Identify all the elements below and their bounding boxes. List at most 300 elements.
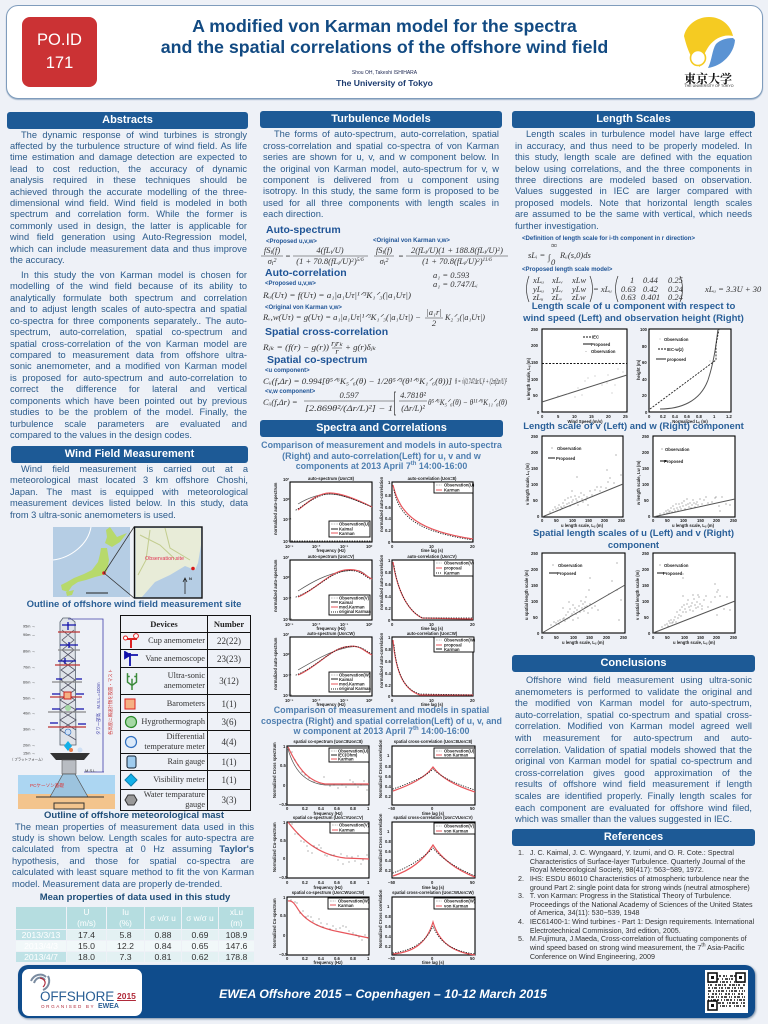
equations: auto-spectrum: σ: [268, 256, 272, 266]
chart: u length scale vs wind speed: u length scale, Lᵤ (m): [526, 357, 531, 400]
chart: w spatial cross-correlation: 50: [470, 956, 475, 961]
heading: conclusions: Conclusions: [600, 657, 666, 669]
reference list: 1. J. C. Kaimal, J. C. Wyngaard, Y. Izumi, and O. R. Cote.: Spectral: [518, 849, 734, 857]
chart: w auto-correlation: 20: [470, 698, 475, 703]
table: measurement devices: gauge: [185, 800, 205, 809]
chart: u length scale vs wind speed: IEC: [592, 334, 599, 340]
chart: v spatial co-spectrum: 0.2: [302, 880, 308, 885]
equations: auto-spectrum: /U): [485, 245, 498, 255]
conclusions text: which was smaller than the values suggested in IEC.: [515, 814, 732, 824]
chart: w spatial co-spectrum: 0: [286, 956, 289, 961]
poster id badge: PO.ID: [37, 31, 82, 49]
chart: w auto-spectrum: 10⁻³: [285, 698, 294, 703]
poster id badge: [22, 17, 97, 87]
chart: u auto-spectrum: 10²: [283, 477, 290, 482]
table: mean properties of data: 0.62: [192, 952, 208, 962]
caption: spatial length scales: [533, 528, 734, 550]
abstract text: spatial cross-correlation of the von Karman model are: [10, 339, 247, 349]
equations: auto-spectrum: ): [353, 256, 357, 266]
equations: auto-spectrum: i: [270, 250, 272, 256]
chart: v spatial cross-correlation: Observation(V): [444, 824, 475, 828]
chart: w length scale: 150: [642, 466, 650, 471]
chart: v length scale: 0: [537, 514, 540, 519]
chart: v spatial co-spectrum: spatial co-spectrum (Uon=VUon=V): [293, 815, 364, 820]
chart: w auto-correlation: [379, 631, 476, 707]
chart: v spatial cross-correlation: von Karman: [444, 828, 469, 834]
chart: v spatial cross-correlation: 50: [470, 880, 475, 885]
chart: u length scale vs height: 60: [642, 360, 647, 365]
chart: spatial v length scale: 200: [713, 635, 721, 640]
table: mean properties of data: xLu: [230, 908, 243, 917]
length scales text: further investigation.: [515, 221, 599, 231]
conclusions text: results of offshore wind field measurement if length: [515, 779, 752, 789]
university name: 東京大学: [684, 70, 732, 87]
chart: u auto-spectrum: auto-spectrum (Uon=8): [308, 476, 355, 481]
abstract text: spectrum and correlation form. While the former is: [10, 209, 247, 219]
chart: u auto-spectrum: normalized auto-spectrum: [273, 482, 278, 535]
heading: length scales: [512, 111, 755, 128]
measurement text: Wind field measurement is carried out at a: [21, 464, 248, 474]
caption: spatial comparison: w component at 2013 April 7th 14:00-16:00: [293, 726, 470, 736]
equations: auto-spectrum: (1 + 70.8(fL: [422, 256, 464, 266]
chart: w spatial co-spectrum: Karman: [338, 903, 354, 908]
equations: auto-spectrum: 2(fL: [411, 245, 425, 255]
chart: u length scale vs wind speed: 250: [531, 327, 539, 332]
chart: w auto-correlation: 0: [388, 694, 391, 699]
chart: u auto-correlation: 1: [388, 480, 391, 485]
chart: v spatial cross-correlation: 1: [387, 829, 390, 834]
equations: spatial co-spectrum: 4.781θ²: [400, 390, 426, 400]
length scales text: three directions are modeled based on observation.: [515, 175, 752, 185]
chart: u length scale vs height: 40: [642, 377, 647, 382]
measurement text: meteorological mast located 3 km offshore Choshi,: [10, 475, 248, 485]
chart: w spatial cross-correlation: −50: [388, 956, 396, 961]
equations: auto-correlation: <Proposed u,v,w>: [265, 281, 316, 287]
equations: spatial cross-correlation: Spatial cross-correlation: [265, 326, 388, 338]
equations: proposed length scale model: 0.25: [668, 275, 683, 285]
chart: w length scale: [636, 434, 738, 528]
chart: w auto-spectrum: 10⁻⁴: [283, 693, 292, 698]
equations: auto-spectrum: (f): [384, 245, 392, 255]
chart: w auto-correlation: time lag (s): [421, 702, 444, 707]
chart: u auto-correlation: auto-correlation (Uon=8): [408, 476, 457, 481]
chart: w spatial co-spectrum: 0.4: [318, 956, 324, 961]
chart: w spatial cross-correlation: spatial cross-correlation (Uon=WUon=W): [392, 890, 474, 895]
equations: length scale definition: [522, 236, 695, 267]
chart: v spatial co-spectrum: Observation(V): [339, 822, 370, 828]
chart: w spatial co-spectrum: 0.5: [280, 913, 286, 918]
chart: w spatial cross-correlation: Normalized Cross correlation: [378, 889, 383, 948]
table: measurement devices: 3(3): [222, 795, 236, 805]
equations: auto-spectrum: 5/6: [357, 257, 364, 263]
equations: auto-spectrum: σ: [380, 256, 384, 266]
chart: spatial u length scale: Proposed: [557, 571, 577, 576]
chart: v length scale: 100: [569, 518, 577, 523]
abstract text: wind field generation using Auto-Regression model,: [10, 232, 247, 242]
table: measurement devices: 4(4): [222, 737, 236, 747]
chart: v auto-spectrum: 10⁻³: [285, 622, 294, 627]
reference list: Characteristics of Surface-layer Turbulence. Quarterly Journal of the: [530, 858, 745, 866]
equations: length scale definition: Rᵢᵢ(s,0)ds: [559, 250, 591, 260]
chart: u auto-spectrum: 10⁰: [283, 497, 290, 502]
caption: auto-spectra comparison: Comparison of measurement and models in auto-spectra: [261, 440, 502, 450]
chart: v spatial co-spectrum: 0.5: [280, 838, 286, 843]
chart: w auto-correlation: 0.6: [385, 659, 391, 664]
chart: u spatial co-spectrum: −0.5: [279, 802, 288, 807]
equations: auto-correlation: [262, 267, 485, 328]
length scales text: Values suggested in IEC are larger compared with: [515, 186, 752, 196]
chart: u length scale vs wind speed: Observation: [591, 349, 616, 354]
measurement text: Japan. The mast is equipped with meteorological: [10, 487, 248, 497]
panel: references: [512, 829, 755, 960]
conclusions text: cross-correlation gives good approximation of the: [515, 768, 752, 778]
abstract text: time estimation and damage detection are expected to: [10, 152, 247, 162]
chart: v auto-spectrum: [273, 554, 373, 631]
chart: spatial u length scale: u spatial length scale (m): [524, 569, 529, 620]
chart: w length scale: 0: [648, 514, 651, 519]
chart: v length scale: 250: [531, 434, 539, 439]
chart: v auto-spectrum: original Karman: [339, 609, 371, 614]
table: mean properties of data: (%): [119, 919, 132, 928]
table: mean properties of data: 0.81: [155, 952, 171, 962]
caption: spatial comparison: [261, 705, 502, 736]
equations: auto-correlation: a₁ = 0.747/Lᵢ: [433, 279, 478, 289]
equations: auto-spectrum: i: [464, 261, 466, 267]
chart: w spatial cross-correlation: 0.4: [385, 934, 391, 939]
caption: mast outline: Outline of offshore meteorological mast: [44, 810, 224, 821]
equations: proposed length scale model: xLᵤ: [532, 275, 544, 285]
chart: w spatial co-spectrum: 0.8: [350, 956, 356, 961]
chart: spatial u length scale: 0: [541, 635, 544, 640]
chart: v spatial co-spectrum: 0.6: [334, 880, 340, 885]
table: measurement devices: Ultra-sonic: [168, 671, 205, 680]
chart: u length scale vs wind speed: 150: [531, 360, 539, 365]
authors: Shou OH, Takeshi ISHIHARA: [352, 70, 417, 76]
reference list: ground Part 2: single point data for strong winds (neutral atmosphere): [530, 884, 750, 892]
chart: v auto-correlation: 0.8: [385, 570, 391, 575]
table: measurement devices: Barometers: [167, 698, 205, 708]
chart: w length scale: 200: [642, 450, 650, 455]
equations: spatial cross-correlation: Rⱼₖ = (f(r) − g(r)): [262, 342, 329, 352]
chart: v spatial co-spectrum: 0: [286, 880, 289, 885]
equations: proposed length scale model: yLᵥ: [551, 284, 563, 294]
chart: w length scale: Observation: [665, 447, 690, 452]
caption: spatial comparison: Comparison of measurement and models in spatial: [274, 705, 489, 715]
equations: auto-spectrum: 2: [385, 258, 388, 264]
chart: u auto-correlation: [379, 476, 475, 553]
chart: spatial v length scale: 50: [665, 635, 670, 640]
turbulence text: cross-correlation and spatial co-spectra of von Karman: [263, 141, 499, 151]
chart: u spatial co-spectrum: 1: [367, 806, 370, 811]
equations: auto-spectrum: i: [382, 250, 384, 256]
chart: spatial v length scale: 150: [697, 635, 705, 640]
table: measurement devices: Vane anemoscope: [145, 654, 205, 662]
conclusions text: correlation. Modified von Karman model agreed well: [515, 721, 752, 731]
table: mean properties of data: 12.2: [117, 941, 134, 951]
illustration: offshore meteorological mast: 15m →: [23, 752, 35, 756]
equations: proposed length scale model: 0.63: [621, 284, 636, 294]
turbulence text: series are shown for u, v, and w component below. In: [263, 152, 499, 162]
chart: u length scale vs wind speed: 50: [533, 393, 538, 398]
equations: auto-spectrum: 2: [477, 258, 480, 264]
equations: proposed length scale model: xLw: [571, 275, 586, 285]
length scales text: in accuracy, and thus need to be properly modeled. In: [515, 141, 752, 151]
equations: auto-spectrum: 2: [497, 247, 500, 253]
chart: spatial v length scale: 100: [642, 599, 650, 604]
heading: wind field measurement: Wind Field Measurement: [65, 448, 194, 460]
chart: u auto-spectrum: 10⁻²: [312, 544, 321, 549]
chart: v length scale: [525, 434, 626, 528]
chart: v auto-correlation: proposal: [444, 566, 462, 570]
table: measurement devices: Hygrothermograph: [141, 716, 205, 726]
chart: spatial u length scale: [524, 551, 628, 645]
measurement text: from 3 ultra-sonic anemometers is used.: [10, 510, 176, 520]
chart: spatial v length scale: Proposed: [663, 571, 683, 576]
icon: cup anemometer: [123, 633, 139, 648]
table: mean properties of data: 0.69: [192, 930, 208, 940]
logo swirl: [30, 974, 50, 991]
chart: v auto-correlation: normalized auto-correlation: [379, 554, 384, 610]
chart: spatial u length scale: Observation: [558, 563, 583, 568]
chart: v auto-correlation: 0: [391, 622, 394, 627]
equations: length scale definition: <Definition of length scale for i-th component in r direction>: [522, 236, 695, 242]
chart: u length scale vs height: 20: [642, 393, 647, 398]
equations: proposed length scale model: 1: [630, 275, 634, 285]
equations: proposed length scale model: 0.24: [668, 284, 684, 294]
chart: spatial u length scale: 100: [570, 635, 578, 640]
chart: w spatial cross-correlation: Observation(W): [444, 898, 476, 904]
map: choshi observation site inset: [134, 527, 202, 598]
text: mean properties description: hypothesis, and those for spatial co-spectra are: [12, 856, 254, 866]
turbulence text: [263, 129, 499, 219]
chart: w auto-spectrum: normalized auto-spectrum: [273, 637, 278, 690]
equations: auto-spectrum: fS: [264, 245, 270, 255]
illustration: offshore meteorological mast: 80m →: [23, 650, 35, 654]
footer logo: offshore 2015: [22, 969, 142, 1016]
measurement text: measurement devices listed below. In this study, data: [10, 498, 248, 508]
chart: v spatial co-spectrum: 0.8: [350, 880, 356, 885]
chart: w spatial cross-correlation: 0.6: [385, 924, 391, 929]
equations: proposed length scale model: 0.44: [643, 275, 659, 285]
chart: w spatial co-spectrum: Normalized Co-spectrum: [272, 898, 277, 948]
chart: u auto-correlation: Karman: [444, 488, 460, 492]
title: [161, 16, 608, 57]
caption: auto-spectra comparison: [261, 440, 502, 471]
chart: w auto-spectrum: mod.Karman: [339, 682, 365, 686]
chart: u length scale vs height: 1.2: [726, 414, 732, 419]
chart: w auto-correlation: 10: [429, 698, 434, 703]
chart: u length scale vs height: [636, 327, 732, 424]
turbulence text: component is delivered from u component using: [263, 175, 499, 185]
equations: spatial co-spectrum: θ = √(0.747Δr/L)² + (2πfΔr/U)²: [455, 376, 507, 386]
chart: w auto-spectrum: 10⁰: [366, 698, 373, 703]
chart: w length scale: u length scale, Lᵤ (m): [672, 523, 715, 528]
chart: u auto-spectrum: Karman: [339, 531, 355, 536]
abstract text: compared to measurement data from offshore ultra-: [10, 350, 247, 360]
text: mean properties description: The mean properties of measurement data used in this: [15, 822, 254, 832]
table: mean properties of data: 2013/3/13: [22, 930, 60, 940]
chart: v spatial cross-correlation: [378, 813, 475, 890]
chart: u spatial co-spectrum: frequency (Hz): [313, 811, 343, 816]
chart: u spatial cross-correlation: Normalized Cross correlation: [378, 739, 383, 798]
map: choshi observation site inset: Observation site: [145, 556, 184, 562]
chart: u spatial cross-correlation: von Karman: [444, 752, 469, 758]
chart: v auto-spectrum: mod.Karman: [339, 604, 365, 610]
equations: proposed length scale model: = xLᵤ: [593, 284, 612, 294]
table: mean properties of data: 5.8: [119, 930, 132, 940]
chart: w spatial co-spectrum: 1: [283, 895, 286, 900]
chart: u length scale vs height: 0: [648, 414, 651, 419]
chart: v spatial co-spectrum: Karman: [339, 828, 355, 832]
measurement text: [10, 464, 248, 520]
chart: u length scale vs wind speed: 20: [606, 414, 611, 419]
table: measurement devices: Devices: [150, 619, 178, 629]
chart: w length scale: 0: [652, 518, 655, 523]
chart: u length scale vs wind speed: 15: [589, 414, 594, 419]
equations: spatial co-spectrum: Cᵢᵢ(f,Δr) =: [263, 397, 298, 407]
chart: w spatial cross-correlation: 0.2: [385, 944, 391, 949]
abstract text: sonic anemometer, and a modified von Karman model: [10, 361, 247, 371]
icon: university of tokyo ginkgo logo: THE UNIVERSITY OF TOKYO: [684, 84, 734, 88]
table: mean properties of data: 0.65: [192, 941, 208, 951]
chart: u auto-correlation: Observation(U): [444, 482, 475, 488]
chart: v length scale: 250: [618, 518, 626, 523]
heading: wind field measurement: [11, 446, 248, 463]
chart: u spatial cross-correlation: 0.2: [385, 794, 391, 799]
equations: auto-correlation: <Original von Karman v,w>: [265, 305, 342, 311]
chart: spatial v length scale: 0: [652, 635, 655, 640]
chart: v spatial cross-correlation: 0.4: [385, 858, 391, 863]
chart: v auto-correlation: 1: [388, 558, 391, 563]
chart: u length scale vs height: 0.2: [660, 414, 666, 419]
table: mean properties of data: σ v/σ u: [150, 914, 176, 922]
chart: spatial u length scale: 100: [531, 599, 539, 604]
caption: length scale of u: Length scale of u component with respect to: [532, 301, 735, 312]
poster id badge: 171: [46, 54, 73, 72]
chart: spatial u length scale: 150: [531, 583, 539, 588]
heading: references: [512, 829, 755, 846]
illustration: offshore meteorological mast: （ プラットフォーム）: [10, 756, 45, 762]
chart: v spatial cross-correlation: 0.6: [385, 849, 391, 854]
chart: v spatial co-spectrum: −0.5: [279, 875, 288, 880]
chart: spatial v length scale: 200: [642, 567, 650, 572]
poster header: [6, 5, 763, 99]
equations: auto-spectrum: i: [384, 261, 386, 267]
conclusions text: the modified von Karman model for auto-spectrum,: [515, 698, 752, 708]
reference list: Proceedings of the National Academy of Sciences of the United States: [530, 901, 753, 909]
conclusions text: correlation. Validation of spatial models showed that the: [515, 745, 752, 755]
chart: w spatial co-spectrum: 1: [367, 956, 370, 961]
panel: length scales: [512, 111, 755, 231]
equations: proposed length scale model: 0.63: [621, 292, 636, 302]
chart: v spatial cross-correlation: Normalized Cross correlation: [378, 813, 383, 872]
equations: auto-spectrum: fS: [376, 245, 382, 255]
chart: w spatial co-spectrum: [272, 890, 370, 965]
reference list: Royal Meteorological Society, 98(417): 563−589, 1972.: [530, 866, 704, 874]
equations: spatial co-spectrum: Spatial co-spectrum: [267, 354, 367, 366]
chart: w auto-correlation: normalized auto-correlation: [379, 632, 384, 688]
table: mean properties of data: [16, 907, 254, 962]
chart: spatial u length scale: 200: [603, 635, 611, 640]
equations: auto-correlation: Rᵤ(Uτ) = f(Uτ) = a₁|a₁Uτ|¹ᐟ³K₁ᐟ₃(|a₁Uτ|): [262, 290, 411, 300]
logo organiser: ORGANISED BY EWEA: [41, 1003, 119, 1010]
equations: auto-spectrum: (f): [272, 245, 280, 255]
caption: spatial length scales: component: [608, 540, 659, 550]
table: mean properties of data: 0.88: [155, 930, 171, 940]
chart: spatial u length scale: 0: [537, 631, 540, 636]
table: mean properties of data: 178.8: [226, 952, 247, 962]
icon: visibility meter: [124, 773, 138, 787]
map: choshi observation site inset: N: [189, 576, 192, 581]
chart: u spatial co-spectrum: 0: [286, 806, 289, 811]
equations: proposed length scale model: zLw: [571, 292, 586, 302]
table: measurement devices: anemometer: [164, 681, 205, 690]
caption: spatial length scales: Spatial length scales of u (Left) and v (Right): [533, 528, 734, 539]
length scales text: Length scales in turbulence model have large effect: [526, 129, 752, 139]
illustration: offshore meteorological mast: 30m →: [23, 728, 35, 732]
icon: hygrothermograph: [124, 716, 138, 728]
equations: proposed length scale model: 0.42: [643, 284, 659, 294]
chart: u auto-spectrum: Observation(U): [339, 522, 370, 526]
chart: w spatial co-spectrum: frequency (Hz): [313, 960, 343, 965]
reference list: 2. IHS: ESDU 86010 Characteristics of atmospheric turbulence near the: [518, 875, 749, 883]
chart: u spatial cross-correlation: 50: [470, 806, 475, 811]
equations: auto-spectrum: i: [331, 250, 333, 256]
chart: v auto-spectrum: 10²: [283, 555, 290, 560]
chart: spatial u length scale: 250: [531, 551, 539, 556]
equations: auto-spectrum: =: [398, 251, 404, 261]
chart: u auto-correlation: 0: [391, 544, 394, 549]
table: mean properties of data: 15.0: [78, 941, 95, 951]
chart: w auto-correlation: Karman: [444, 647, 460, 652]
chart: v auto-correlation: [379, 554, 475, 631]
chart: w auto-spectrum: auto-spectrum (Uon=W): [307, 631, 355, 636]
caption: mean properties table: Mean properties of data used in this study: [40, 892, 230, 903]
chart: w spatial co-spectrum: spatial co-spectrum (Uon=WUon=W): [292, 890, 365, 895]
chart: w auto-spectrum: original Karman: [339, 686, 371, 691]
abstract text: turbulence scale parameters are evaluated and: [10, 419, 247, 429]
abstract text: In this study the von Karman model is chosen for: [21, 270, 247, 280]
table: measurement devices: Water temparature: [144, 790, 205, 799]
chart: u spatial co-spectrum: 0.6: [334, 806, 340, 811]
chart: v auto-correlation: 10: [429, 622, 434, 627]
chart: v spatial co-spectrum: frequency (Hz): [313, 885, 343, 890]
chart: u auto-correlation: normalized auto-correlation: [379, 476, 384, 532]
conclusions text: scales are identified properly. Finally length scales for: [515, 791, 752, 801]
abstract text: dimensional wind field. Wind field is modeled in both: [10, 198, 247, 208]
equations: spatial cross-correlation: + g(r)δⱼₖ: [345, 342, 376, 352]
equations: spatial cross-correlation: rⱼrₖ: [331, 338, 343, 348]
chart: u length scale vs wind speed: 100: [531, 377, 539, 382]
table: mean properties of data: 7.3: [119, 952, 132, 962]
footer band: [18, 965, 755, 1018]
chart: u length scale vs wind speed: [526, 327, 628, 424]
equations: proposed length scale model: xLᵥ: [551, 275, 563, 285]
equations: spatial co-spectrum: Cᵢᵢ(f,Δr) = 0.994[θ⁵ᐟ⁶K₅ᐟ₆(θ) − 1/2θ⁵ᐟ³(θ¹ᐟ⁶K₁ᐟ₆(θ))]: [263, 376, 452, 386]
caption: length scale of v and w: Length scale of v (Left) and w (Right) component: [523, 421, 744, 432]
chart: w length scale: 150: [697, 518, 705, 523]
illustration: offshore meteorological mast: 20m →: [23, 744, 35, 748]
abstract text: The dynamic response of wind turbines is strongly: [21, 130, 247, 140]
chart: v auto-correlation: 0.4: [385, 594, 391, 599]
table: mean properties of data: (m/s): [77, 919, 96, 928]
conclusions text: Offshore wind field measurement using ultra-sonic: [526, 675, 752, 685]
text: mean properties description: [12, 822, 254, 889]
heading: references: References: [604, 831, 663, 843]
abstract text: and to adjust length scales of auto-spectra and spatial: [10, 304, 247, 314]
chart: v spatial co-spectrum: [272, 815, 370, 890]
chart: u auto-spectrum: 10⁻¹: [340, 544, 349, 549]
